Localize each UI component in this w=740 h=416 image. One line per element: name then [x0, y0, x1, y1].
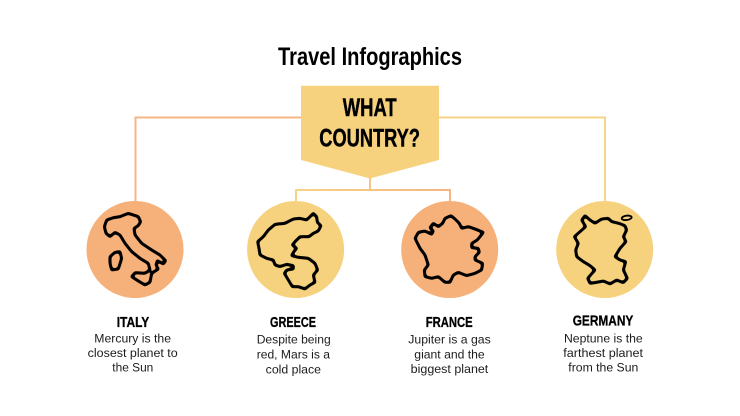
description: France: giant and the [414, 347, 485, 361]
description: France: biggest planet [411, 362, 489, 376]
panel: Germany [556, 201, 653, 375]
description: Germany: from the Sun [568, 361, 638, 375]
icon: Greece map [258, 213, 321, 289]
connector: question box to Greece and France [296, 176, 450, 201]
icon: Germany map [574, 215, 632, 284]
icon: France map [415, 216, 483, 282]
title: Travel Infographics [278, 43, 462, 71]
icon: Italy map [104, 213, 166, 285]
circle: Greece [247, 201, 344, 298]
description: Greece: Despite being [257, 333, 331, 347]
description: Italy: the Sun [112, 361, 153, 375]
description: Italy: Mercury is the [94, 332, 171, 346]
connector: question box to Germany [439, 118, 605, 201]
box text: WHAT [343, 94, 397, 122]
connector: question box to Italy [136, 118, 301, 201]
box shape [301, 86, 439, 178]
label: France: FRANCE [426, 314, 473, 331]
panel: France [401, 201, 498, 376]
label: Germany: GERMANY [573, 313, 633, 330]
description: France [408, 333, 491, 376]
description: Germany: Neptune is the [564, 332, 643, 346]
description: Italy: closest planet to [88, 346, 178, 360]
panel: Greece [247, 201, 344, 376]
circle: France [401, 201, 498, 298]
question box [301, 86, 439, 178]
description: Germany [563, 332, 644, 375]
box text [319, 94, 420, 153]
circle: Germany [556, 201, 653, 298]
description: France: Jupiter is a gas [408, 333, 491, 347]
description: Italy [88, 332, 178, 375]
description: Greece: cold place [266, 362, 321, 376]
circle: Italy [86, 201, 184, 298]
label: Italy: ITALY [117, 314, 149, 331]
description: Greece: red, Mars is a [257, 347, 330, 361]
label: Greece: GREECE [270, 314, 316, 331]
description: Germany: farthest planet [563, 346, 644, 360]
description: Greece [257, 333, 331, 376]
box text: COUNTRY? [319, 125, 420, 153]
panel: Italy [86, 201, 184, 375]
